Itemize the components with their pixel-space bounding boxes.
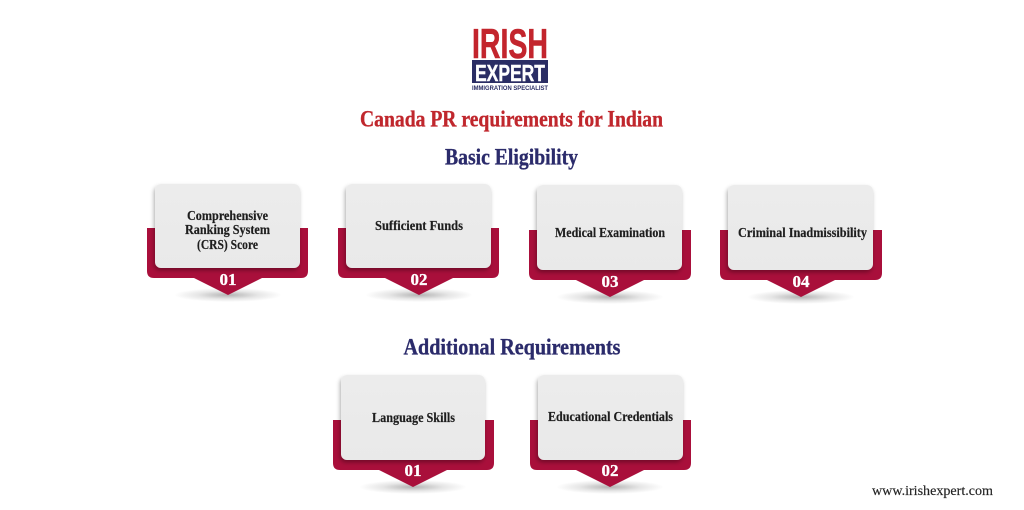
card 01: Language Skills: Language Skills: [372, 410, 455, 425]
card 02: Sufficient Funds: [338, 184, 499, 302]
card 01: Comprehensive Ranking System (CRS) Score: [147, 184, 308, 302]
card 01: Language Skills: 01: [404, 461, 422, 480]
card 02: Sufficient Funds: 02: [410, 270, 428, 289]
logo tagline: IMMIGRATION SPECIALIST: [472, 86, 548, 92]
card 02: Educational Credentials: Educational Credentials: [548, 409, 673, 424]
card 02: Educational Credentials: [530, 375, 691, 494]
card 01: Comprehensive Ranking System (CRS) Score: 01: [220, 270, 236, 289]
logo: Irish Expert: [472, 20, 548, 92]
logo band: EXPERT: EXPERT: [475, 60, 545, 86]
card 03: Medical Examination: 03: [602, 272, 618, 291]
logo word: IRISH: IRISH: [472, 20, 548, 67]
card 01: Comprehensive Ranking System (CRS) Score: (CRS) Score: [197, 237, 258, 252]
heading: Basic Eligibility: Basic Eligibility: [445, 144, 578, 170]
title: Canada PR requirements for Indian: [360, 106, 663, 132]
heading: Additional Requirements: Additional Requirements: [404, 334, 621, 360]
card 02: Educational Credentials: 02: [602, 461, 618, 480]
website url: www.irishexpert.com: [872, 483, 994, 498]
card 01: Language Skills: [333, 375, 494, 494]
card 01: Comprehensive Ranking System (CRS) Score: Comprehensive: [187, 208, 268, 223]
card 02: Sufficient Funds: Sufficient Funds: [375, 218, 463, 233]
card 04: Criminal Inadmissibility: Criminal Inadmissibility: [738, 225, 867, 240]
card 04: Criminal Inadmissibility: [720, 185, 882, 304]
card 01: Comprehensive Ranking System (CRS) Score: Ranking System: [185, 222, 271, 237]
card 04: Criminal Inadmissibility: 04: [792, 272, 810, 291]
card 03: Medical Examination: [529, 185, 691, 304]
card 03: Medical Examination: Medical Examination: [555, 225, 665, 240]
